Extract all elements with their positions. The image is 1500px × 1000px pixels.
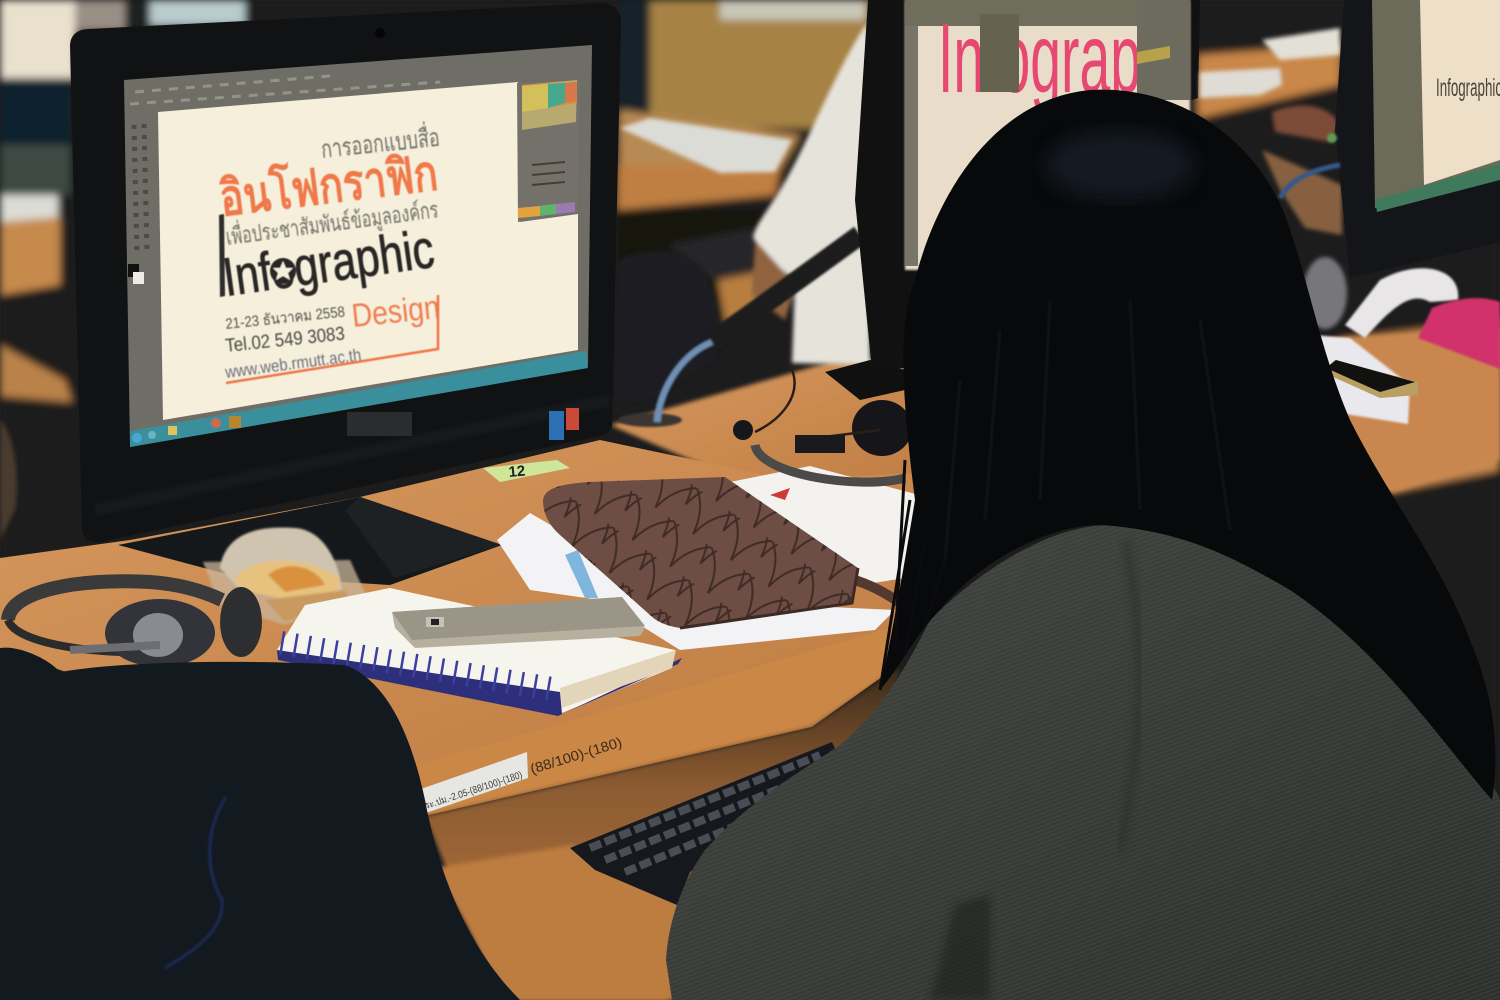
pen bbox=[565, 550, 598, 598]
screen panel bbox=[124, 45, 592, 447]
woman: sweater bbox=[666, 525, 1500, 1000]
pastry box bbox=[203, 527, 366, 625]
loose hair strands bbox=[880, 460, 945, 690]
monitor bezel bbox=[70, 3, 621, 542]
foreground person: dark jacket bbox=[0, 648, 520, 1000]
spectrum bbox=[518, 202, 575, 218]
pink pouch bbox=[1418, 298, 1500, 369]
artboard bbox=[158, 82, 578, 420]
back desk with microphone bbox=[610, 330, 1500, 495]
taskbar icons bbox=[132, 433, 142, 443]
sliders bbox=[532, 162, 565, 185]
notebook spiral bbox=[281, 643, 558, 690]
orange frame bbox=[226, 295, 438, 383]
Thai heading: การออกแบบสื่อ bbox=[319, 120, 441, 164]
panels bbox=[517, 80, 580, 222]
woman: long black hair bbox=[880, 90, 1496, 800]
hair sheen bbox=[1045, 130, 1195, 200]
desk label sticker: ระ.ปม.-2.05-(88/100)-(180) bbox=[424, 770, 524, 812]
headset on back desk bbox=[733, 365, 912, 482]
third monitor bbox=[1335, 0, 1500, 278]
main monitor bbox=[70, 3, 621, 542]
tools column bbox=[134, 124, 147, 255]
notebook on back desk bbox=[620, 118, 792, 173]
menu bar detail bbox=[130, 76, 440, 104]
black office chair bbox=[617, 251, 720, 402]
main desk surface bbox=[0, 440, 960, 790]
shelf under desk bbox=[425, 667, 900, 1000]
number tag 12 bbox=[483, 460, 570, 482]
second monitor bbox=[825, 0, 1200, 400]
webcam bbox=[375, 28, 385, 38]
monitor stand base bbox=[118, 497, 502, 585]
monitor text: Infographic: Infograp bbox=[938, 3, 1141, 113]
Design: Design bbox=[350, 288, 441, 334]
star in o bbox=[270, 258, 296, 284]
taskbar bbox=[130, 351, 588, 447]
tool fill box bbox=[128, 264, 139, 277]
number tag 12: 12 bbox=[508, 463, 526, 481]
papers and phone on right desk bbox=[1303, 257, 1500, 424]
papers under bag bbox=[497, 466, 968, 650]
desk front edge bbox=[418, 625, 900, 816]
right desk items bbox=[1200, 28, 1342, 235]
Thai subtitle: เพื่อประชาสัมพันธ์ข้อมูลองค์กร bbox=[224, 193, 440, 251]
person in white shirt bbox=[752, 22, 870, 365]
desk label sticker bbox=[418, 734, 624, 815]
vertical bar bbox=[219, 214, 225, 297]
Infographic: Infographic bbox=[219, 219, 438, 308]
monitor arm cable bbox=[618, 235, 860, 427]
Dell badge bbox=[347, 412, 412, 436]
desk label sticker: (88/100)-(180) bbox=[528, 734, 624, 777]
Thai title orange: อินโฟกราฟิก bbox=[216, 143, 441, 227]
edge of person at left bbox=[0, 420, 17, 540]
Intel and Office stickers bbox=[549, 411, 564, 440]
brown zipper pouch bbox=[543, 477, 925, 628]
screen text block bbox=[216, 120, 441, 383]
date: 21-23 ธันวาคม 2558 bbox=[225, 304, 346, 333]
silver smartphone bbox=[392, 597, 645, 648]
spiral notebook bbox=[277, 588, 682, 716]
headphones bbox=[8, 581, 262, 667]
website: www.web.rmutt.ac.th bbox=[223, 345, 362, 382]
colour swatches bbox=[522, 80, 577, 130]
keyboard bbox=[570, 742, 846, 905]
phone number: Tel.02 549 3083 bbox=[224, 324, 346, 357]
smartphone bbox=[1322, 360, 1418, 398]
blue and green cables bbox=[1280, 133, 1340, 198]
